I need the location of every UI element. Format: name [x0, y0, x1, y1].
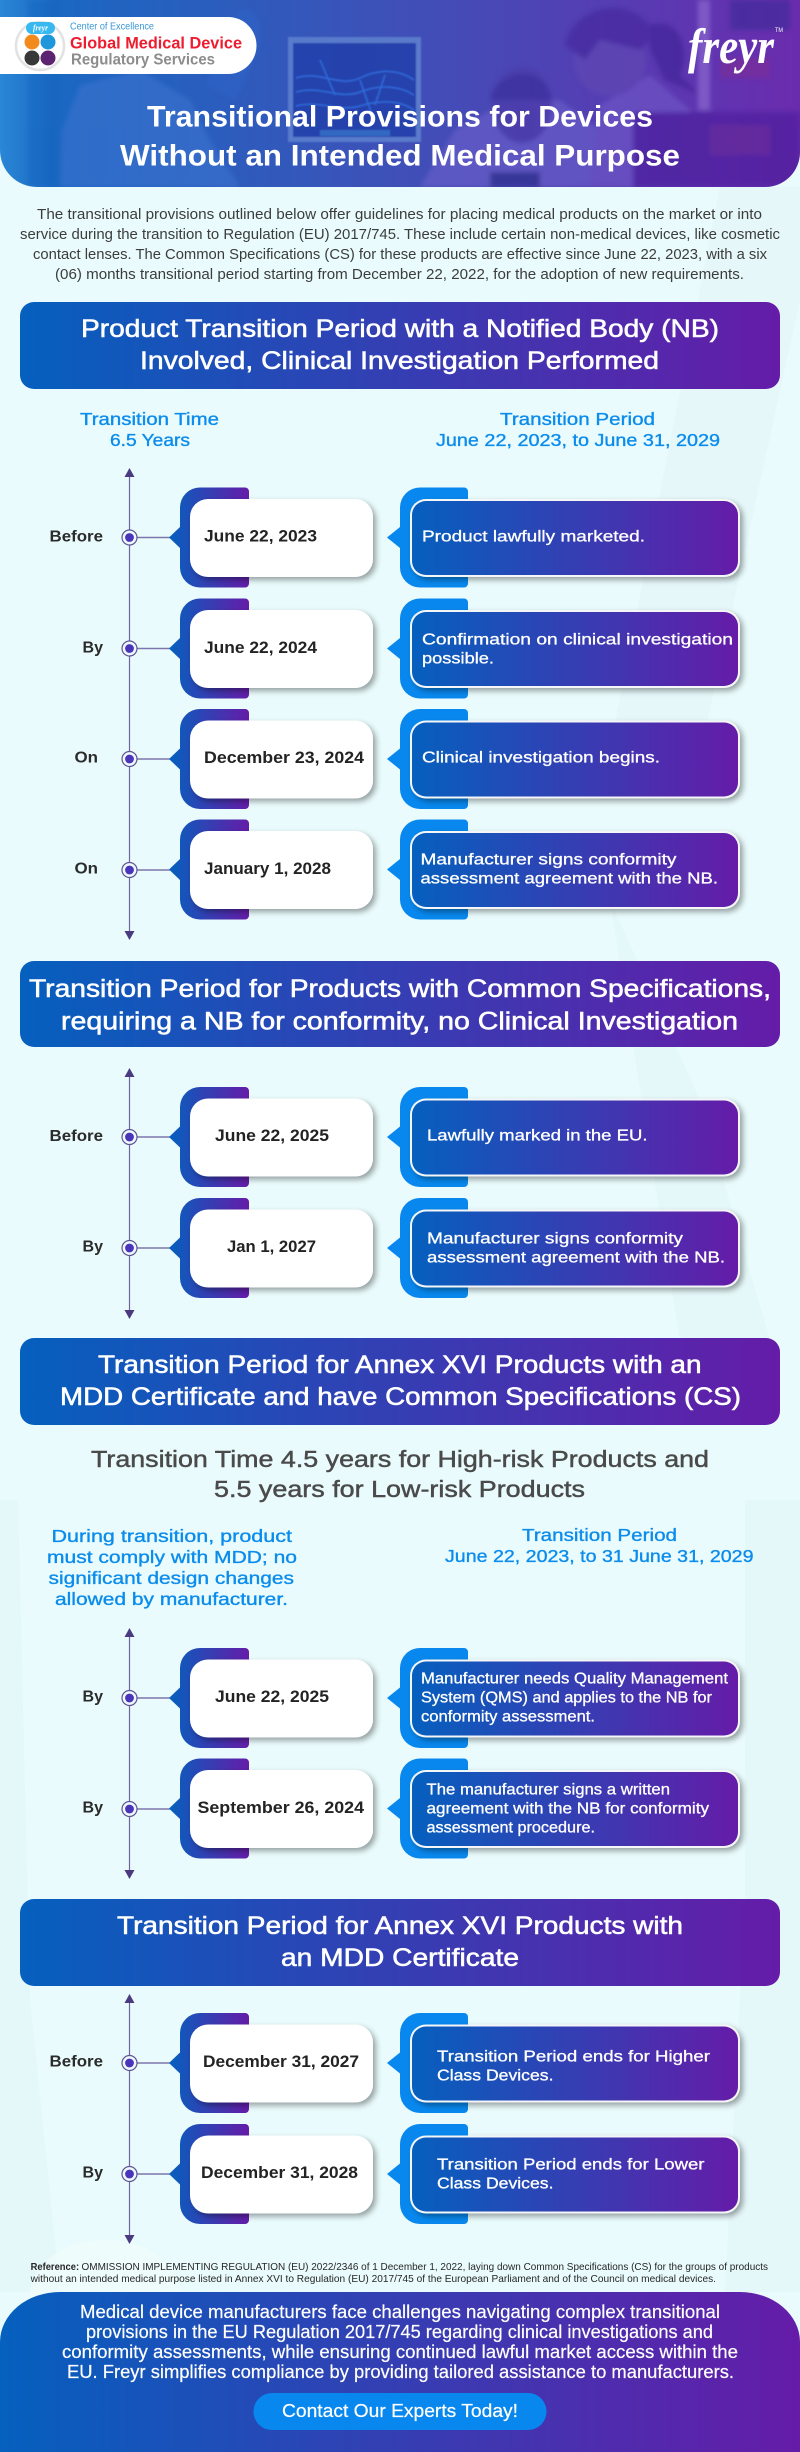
footer text: conformity assessments, while ensuring continued lawful market access within the	[62, 2342, 738, 2362]
info card: Manufacturer needs Quality Management	[421, 1670, 729, 1688]
date card	[169, 2013, 373, 2113]
row: December 31, 2028	[82, 2124, 740, 2224]
date card: September 26, 2024	[198, 1799, 365, 1817]
date card: December 23, 2024	[204, 749, 365, 767]
row: December 31, 2028: By	[82, 2164, 103, 2182]
info card	[387, 820, 740, 920]
section banner 2	[20, 961, 780, 1047]
row: June 22, 2025	[50, 1087, 740, 1187]
info card: Confirmation on clinical investigation	[422, 632, 733, 648]
row: June 22, 2025: Before	[50, 1128, 103, 1145]
row: September 26, 2024	[82, 1758, 740, 1858]
logo: freyr: TM	[775, 28, 783, 34]
section banner 3: Transition Period for Annex XVI Products with an	[98, 1351, 702, 1379]
footer text: provisions in the EU Regulation 2017/745 regarding clinical investigations and	[86, 2322, 713, 2342]
note: during transition: significant design changes	[48, 1568, 294, 1588]
section banner 1: Product Transition Period with a Notified Body (NB)	[81, 315, 719, 343]
logo pill: Center of Excellence	[0, 17, 256, 74]
section banner 1	[20, 302, 780, 389]
timeline 4 axis	[124, 1994, 134, 2244]
date card	[169, 1087, 373, 1187]
reference note: Reference:	[31, 2261, 79, 2273]
date card	[169, 1758, 373, 1858]
subheading: transition time: 5.5 years for Low-risk Products	[214, 1476, 585, 1502]
info card: assessment agreement with the NB.	[427, 1250, 725, 1266]
transition time label: Transition Time	[80, 409, 219, 429]
date card	[169, 1648, 373, 1748]
intro paragraph: service during the transition to Regulation (EU) 2017/745. These include certain non-medical devices, like cosmetic	[20, 227, 780, 243]
date card	[169, 488, 373, 588]
subheading: transition time	[91, 1446, 709, 1502]
info card: Manufacturer signs conformity	[427, 1230, 683, 1248]
date card: June 22, 2025	[215, 1688, 329, 1706]
info card: possible.	[422, 650, 494, 668]
row: June 22, 2023: Before	[50, 528, 103, 546]
date card	[169, 2124, 373, 2224]
date card	[169, 820, 373, 920]
intro paragraph: contact lenses. The Common Specifications (CS) for these products are effective since June 22, 2023, with a six	[33, 247, 768, 263]
row: December 23, 2024: On	[74, 750, 98, 766]
button: contact	[254, 2393, 546, 2430]
transition time label: 6.5 Years	[110, 430, 190, 450]
reference note: without an intended medical purpose listed in Annex XVI to Regulation (EU) 2017/745 of the European Parliament and of the Council on medical devices.	[30, 2273, 716, 2285]
section banner 3: MDD Certificate and have Common Specifications (CS)	[60, 1383, 741, 1411]
footer text	[62, 2302, 738, 2382]
info card: Transition Period ends for Higher	[437, 2048, 711, 2066]
row: June 22, 2024	[82, 598, 740, 698]
info card: Clinical investigation begins.	[422, 750, 660, 766]
section banner 4	[20, 1899, 780, 1986]
timeline 1 axis	[124, 468, 134, 940]
hero header	[0, 0, 800, 187]
section banner 3	[20, 1338, 780, 1425]
info card	[387, 1648, 740, 1748]
row: January 1, 2028: On	[74, 860, 98, 878]
date card	[169, 598, 373, 698]
note: during transition: During transition, product	[52, 1526, 292, 1546]
date card: June 22, 2025	[215, 1127, 329, 1145]
note: during transition: must comply with MDD; no	[47, 1547, 297, 1567]
note: during transition: allowed by manufacturer.	[55, 1589, 288, 1609]
row: Jan 1, 2027	[82, 1198, 740, 1298]
section banner 4: an MDD Certificate	[281, 1944, 519, 1972]
timeline 3 axis	[124, 1628, 134, 1879]
transition time label	[80, 409, 219, 450]
icon: service cluster	[16, 22, 64, 70]
section banner 2: requiring a NB for conformity, no Clinical Investigation	[61, 1008, 738, 1036]
info card	[387, 2124, 740, 2224]
info card	[387, 1758, 740, 1858]
title: Transitional Provisions for Devices	[147, 100, 653, 134]
date card: June 22, 2023	[204, 528, 317, 546]
row: December 31, 2027: Before	[50, 2054, 103, 2070]
info card: Lawfully marked in the EU.	[427, 1128, 648, 1144]
icon: service cluster: freyr	[33, 24, 49, 32]
row: Jan 1, 2027: By	[82, 1238, 103, 1256]
info card: The manufacturer signs a written	[426, 1782, 670, 1798]
button: contact: Contact Our Experts Today!	[282, 2401, 518, 2421]
row: June 22, 2025	[82, 1648, 740, 1748]
info card: System (QMS) and applies to the NB for	[421, 1690, 713, 1706]
info card: Transition Period ends for Lower	[437, 2156, 705, 2174]
row: June 22, 2023	[50, 488, 740, 588]
section banner 2: Transition Period for Products with Common Specifications,	[29, 975, 771, 1003]
footer text: Medical device manufacturers face challenges navigating complex transitional	[80, 2302, 720, 2322]
transition period label	[445, 1525, 754, 1566]
info card	[387, 1087, 740, 1187]
date card	[169, 1198, 373, 1298]
info card: assessment procedure.	[426, 1820, 595, 1836]
intro paragraph: (06) months transitional period starting from December 22, 2022, for the adoption of new requirements.	[55, 267, 744, 283]
info card: Class Devices.	[437, 2068, 554, 2084]
date card: Jan 1, 2027	[227, 1238, 316, 1256]
transition period label: June 22, 2023, to 31 June 31, 2029	[445, 1546, 754, 1566]
info card	[387, 709, 740, 809]
row: December 23, 2024	[74, 709, 740, 809]
info card: assessment agreement with the NB.	[420, 870, 718, 888]
logo pill: Center of Excellence: Global Medical Device	[70, 34, 242, 52]
date card: December 31, 2028	[201, 2164, 358, 2182]
footer panel	[0, 2292, 800, 2452]
row: June 22, 2024: By	[82, 640, 103, 656]
info card	[387, 2013, 740, 2113]
transition period label: June 22, 2023, to June 31, 2029	[436, 430, 720, 450]
reference note: OMMISSION IMPLEMENTING REGULATION (EU) 2022/2346 of 1 December 1, 2022, laying down Common Specifications (CS) for the groups of products	[82, 2261, 768, 2273]
subheading: transition time: Transition Time 4.5 years for High-risk Products and	[91, 1446, 709, 1472]
note: during transition	[47, 1526, 297, 1609]
info card: Class Devices.	[437, 2176, 554, 2192]
row: January 1, 2028	[74, 820, 740, 920]
footer text: EU. Freyr simplifies compliance by providing tailored assistance to manufacturers.	[67, 2362, 734, 2382]
row: December 31, 2027	[50, 2013, 740, 2113]
date card: January 1, 2028	[204, 860, 331, 878]
info card	[387, 598, 740, 698]
transition period label: Transition Period	[522, 1525, 677, 1545]
title	[120, 100, 680, 172]
row: June 22, 2025: By	[82, 1688, 103, 1706]
reference note	[30, 2261, 768, 2285]
logo pill: Center of Excellence: Regulatory Services	[71, 52, 215, 68]
info card: Manufacturer signs conformity	[420, 852, 676, 868]
transition period label	[436, 409, 720, 450]
logo: freyr: freyr	[688, 18, 774, 74]
timeline 2 axis	[124, 1068, 134, 1319]
hero photo background	[0, 0, 800, 187]
info card: conformity assessment.	[421, 1708, 595, 1726]
logo pill: Center of Excellence: Center of Excellence	[70, 20, 154, 32]
info card: agreement with the NB for conformity	[426, 1800, 709, 1818]
section banner 4: Transition Period for Annex XVI Products with	[117, 1912, 683, 1940]
transition period label: Transition Period	[500, 409, 655, 429]
section banner 1: Involved, Clinical Investigation Performed	[140, 347, 659, 375]
row: September 26, 2024: By	[82, 1800, 103, 1816]
date card: June 22, 2024	[204, 639, 318, 657]
info card: Product lawfully marketed.	[422, 528, 645, 546]
date card: December 31, 2027	[203, 2053, 359, 2071]
date card	[169, 709, 373, 809]
info card	[387, 1198, 740, 1298]
intro paragraph	[20, 207, 780, 283]
intro paragraph: The transitional provisions outlined below offer guidelines for placing medical products on the market or into	[37, 207, 762, 223]
info card	[387, 488, 740, 588]
title: Without an Intended Medical Purpose	[120, 140, 680, 172]
